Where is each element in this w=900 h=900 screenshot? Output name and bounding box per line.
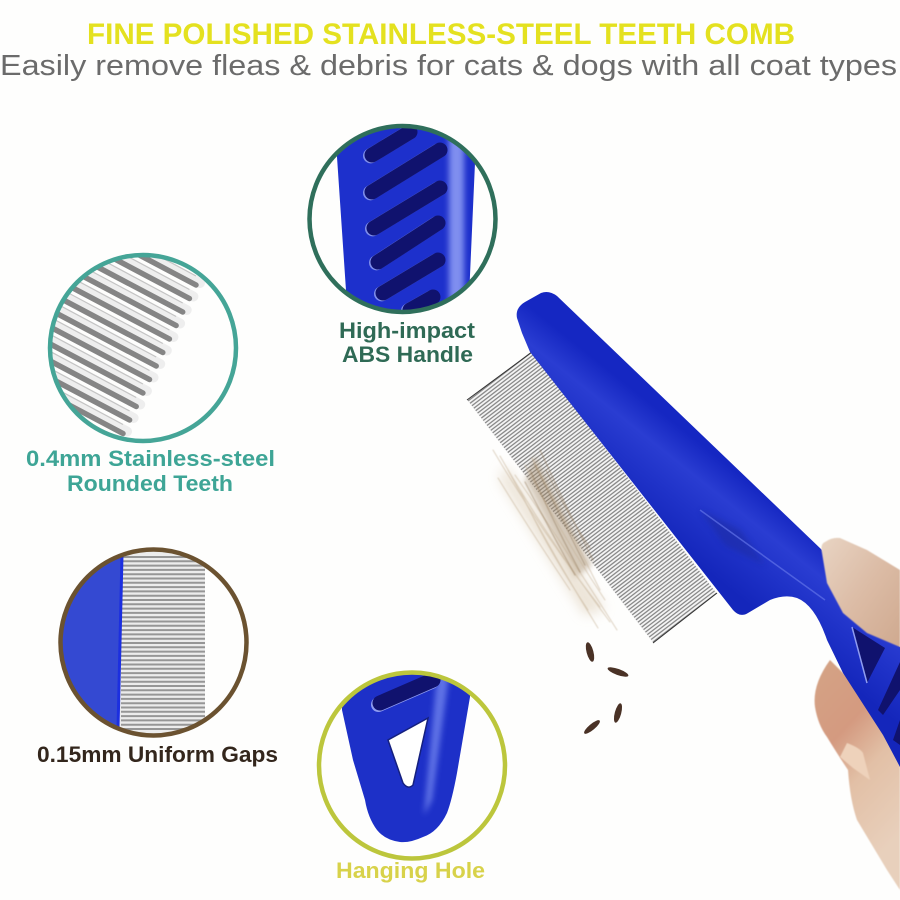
panel: hanging hole detail <box>319 660 505 883</box>
label: High-impact <box>339 318 476 343</box>
ring <box>60 550 246 736</box>
subtitle: Easily remove fleas & debris for cats & dogs with all coat types <box>0 50 897 82</box>
hand: lower fingers <box>815 660 900 890</box>
hand: thumb <box>821 538 900 647</box>
hanging hole <box>388 718 428 787</box>
label <box>339 318 476 367</box>
fingernail <box>840 743 870 780</box>
blue comb handle <box>517 292 900 767</box>
ring <box>310 126 496 312</box>
title: FINE POLISHED STAINLESS-STEEL TEETH COMB <box>87 18 795 51</box>
label: Rounded Teeth <box>67 471 233 496</box>
handle close-up <box>337 128 475 310</box>
caught hair <box>493 450 617 630</box>
handle slots <box>852 627 885 683</box>
ring <box>50 255 236 441</box>
label <box>26 446 275 496</box>
steel comb teeth <box>467 352 717 643</box>
label: 0.15mm Uniform Gaps <box>37 742 278 767</box>
panel: uniform gaps detail <box>37 540 278 767</box>
panel: ABS handle detail <box>310 120 496 367</box>
teeth close-up <box>52 257 205 436</box>
ring <box>319 672 505 858</box>
label: Hanging Hole <box>336 858 485 883</box>
fleas <box>582 641 629 736</box>
comb close-up <box>62 552 205 734</box>
label: ABS Handle <box>342 342 473 367</box>
handle end close-up <box>342 660 470 842</box>
panel: stainless-steel rounded teeth detail <box>26 252 274 491</box>
label: 0.4mm Stainless-steel <box>26 446 275 471</box>
